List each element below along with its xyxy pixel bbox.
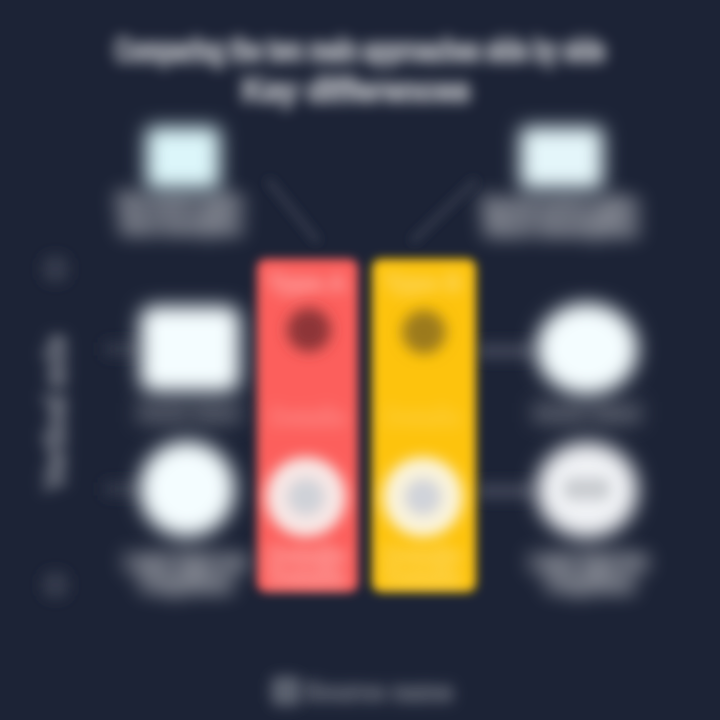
node: left upper card — [140, 306, 240, 392]
left top label — [117, 189, 243, 239]
right top label: Short description — [484, 214, 638, 241]
title — [115, 32, 605, 108]
label: left lower node: Caption — [140, 570, 232, 597]
label: right lower node — [530, 548, 648, 597]
vertical axis label — [39, 256, 72, 598]
label: right lower node: Lower label two — [530, 548, 648, 575]
right upper connector — [478, 343, 534, 359]
left lower connector — [104, 482, 140, 496]
panel: yellow column — [372, 259, 476, 592]
icon: right lower circle inner — [564, 478, 610, 500]
yellow column heading: Type B — [384, 270, 462, 297]
axis top marker — [43, 256, 68, 282]
node: left lower circle — [139, 441, 235, 537]
arrow: right top connector — [412, 180, 476, 242]
yellow column text: Details — [385, 402, 461, 432]
icon: red column dark circle — [287, 308, 331, 352]
footer logo — [271, 676, 301, 706]
panel: red column — [257, 259, 358, 592]
icon: left top device — [146, 127, 220, 189]
icon: right top device — [520, 127, 603, 189]
node: right upper circle — [536, 303, 638, 395]
right lower connector — [478, 483, 534, 499]
label: right lower node: Caption — [546, 570, 634, 597]
yellow column bottom text: Details — [384, 562, 462, 592]
left upper connector — [104, 342, 140, 356]
right top label — [482, 192, 638, 241]
icon: yellow column dark circle — [402, 310, 446, 354]
icon: yellow column white circle — [383, 457, 463, 537]
axis text: Vertical axis — [39, 335, 72, 490]
title: Key differences — [242, 72, 470, 108]
yellow column bottom text: Details — [384, 540, 462, 570]
left top label: Short description — [120, 212, 242, 239]
icon: red column white circle — [266, 457, 346, 537]
label: left lower node — [125, 548, 247, 597]
footer text: Source name — [305, 676, 453, 707]
red column bottom text: Details — [268, 562, 346, 592]
label: left lower node: Lower label one — [125, 548, 247, 575]
red column heading: Type A — [268, 270, 346, 297]
label: right upper node: Node label — [534, 400, 640, 427]
arrow: left top connector — [268, 180, 318, 242]
yellow column bottom text — [384, 540, 462, 592]
node: right lower circle — [536, 442, 638, 538]
left top label: First source option — [117, 189, 243, 216]
label: left upper node: Node label — [138, 400, 240, 427]
red column text: Details — [270, 402, 346, 432]
red column bottom text: Details — [268, 540, 346, 570]
axis bottom marker — [43, 572, 68, 598]
red column bottom text — [268, 540, 346, 592]
